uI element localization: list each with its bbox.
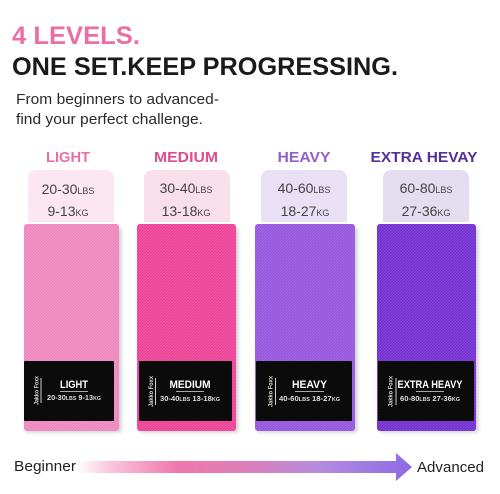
weight pill: heavy: 18-27KG <box>281 203 329 219</box>
label tag: extra heavy <box>378 361 474 421</box>
label: beginner: Beginner <box>14 459 76 475</box>
heading: light: LIGHT <box>46 150 90 166</box>
band: extra heavy <box>377 224 478 432</box>
column: extra heavy <box>370 150 478 432</box>
weight pill: light: 20-30LBS <box>42 181 94 197</box>
label tag: light: LIGHT <box>60 379 88 391</box>
label tag: heavy <box>256 361 352 421</box>
weight pill: heavy <box>261 170 347 222</box>
label tag: heavy: 40-60 LBS 18-27 KG <box>279 396 340 403</box>
band: medium <box>137 224 238 432</box>
subtitle: find your perfect challenge. <box>16 111 203 128</box>
weight pill: medium <box>144 170 230 222</box>
label tag: heavy: HEAVY <box>292 379 328 391</box>
column: heavy <box>255 150 357 432</box>
subtitle: From beginners to advanced- <box>16 91 219 108</box>
label tag: medium: 30-40 LBS 13-18 KG <box>160 396 220 403</box>
label tag: light: Jakko Foxx <box>34 376 40 405</box>
band: heavy <box>255 224 357 432</box>
weight pill: extra heavy: 27-36KG <box>402 203 450 219</box>
heading: extra heavy: EXTRA HEVAY <box>370 150 478 166</box>
band: light <box>24 224 121 432</box>
weight pill: extra heavy <box>383 170 469 222</box>
label tag: medium <box>139 361 232 421</box>
weight pill: medium: 30-40LBS <box>160 180 212 196</box>
title: one set keep progressing: ONE SET.KEEP PROGRESSING. <box>12 53 398 81</box>
weight pill: light <box>28 170 114 222</box>
label: advanced: Advanced <box>417 460 484 476</box>
weight pill: heavy: 40-60LBS <box>278 180 330 196</box>
label tag: extra heavy: Jakko Foxx <box>388 376 394 407</box>
label tag: heavy: Jakko Foxx <box>268 376 274 407</box>
heading: heavy: HEAVY <box>278 150 331 166</box>
label tag: medium: MEDIUM <box>170 379 210 391</box>
label tag: light: 20-30LBS 9-13KG <box>47 395 101 402</box>
arrow: progression <box>77 453 412 481</box>
label tag: medium: Jakko Foxx <box>148 376 155 407</box>
weight pill: medium: 13-18KG <box>162 203 210 219</box>
weight pill: light: 9-13KG <box>47 203 89 219</box>
label tag: light <box>24 361 114 421</box>
column: light <box>24 150 121 432</box>
label tag: extra heavy: 60-80 LBS 27-36 KG <box>400 396 460 403</box>
subtitle <box>16 91 219 128</box>
label tag: extra heavy: EXTRA HEAVY <box>398 379 463 391</box>
heading: medium: MEDIUM <box>154 150 218 166</box>
title: 4 levels: 4 LEVELS. <box>12 22 140 50</box>
weight pill: extra heavy: 60-80LBS <box>400 180 452 196</box>
column: medium <box>137 150 238 432</box>
